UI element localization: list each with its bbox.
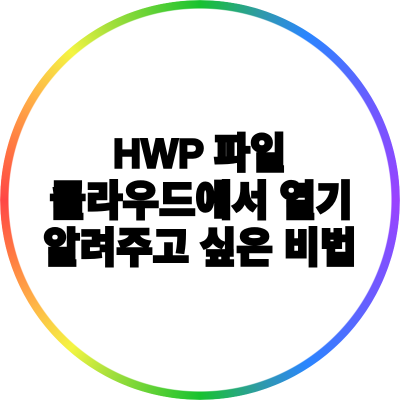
title line 2: 클라우드에서 열기 <box>50 178 352 224</box>
title line 3: 알려주고 싶은 비법 <box>44 225 356 271</box>
title line 1: HWP 파일 <box>113 130 286 176</box>
